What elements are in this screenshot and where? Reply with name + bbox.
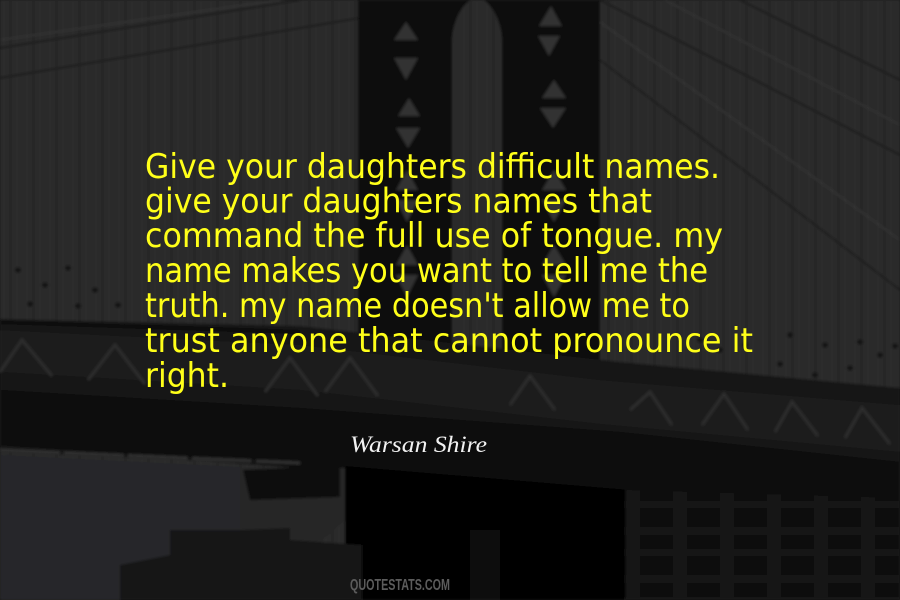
tower xyxy=(358,0,600,470)
central pier xyxy=(345,466,630,600)
quote text: give your daughters names that xyxy=(145,182,652,222)
lower-right buildings xyxy=(470,490,900,600)
quote text: right. xyxy=(145,356,229,396)
author name: Warsan Shire xyxy=(350,432,487,457)
bridge deck xyxy=(0,319,900,500)
quote text: name makes you want to tell me the xyxy=(145,251,708,291)
quote text: Give your daughters difficult names. xyxy=(145,147,720,187)
quote text: command the full use of tongue. my xyxy=(145,216,723,256)
watermark: QUOTESTATS.COM xyxy=(350,577,450,594)
background: street lamps xyxy=(15,265,898,378)
quote text: truth. my name doesn't allow me to xyxy=(145,286,690,326)
quote text: trust anyone that cannot pronounce it xyxy=(145,321,753,361)
quote text xyxy=(145,147,753,396)
lower-left cityscape xyxy=(0,455,362,600)
